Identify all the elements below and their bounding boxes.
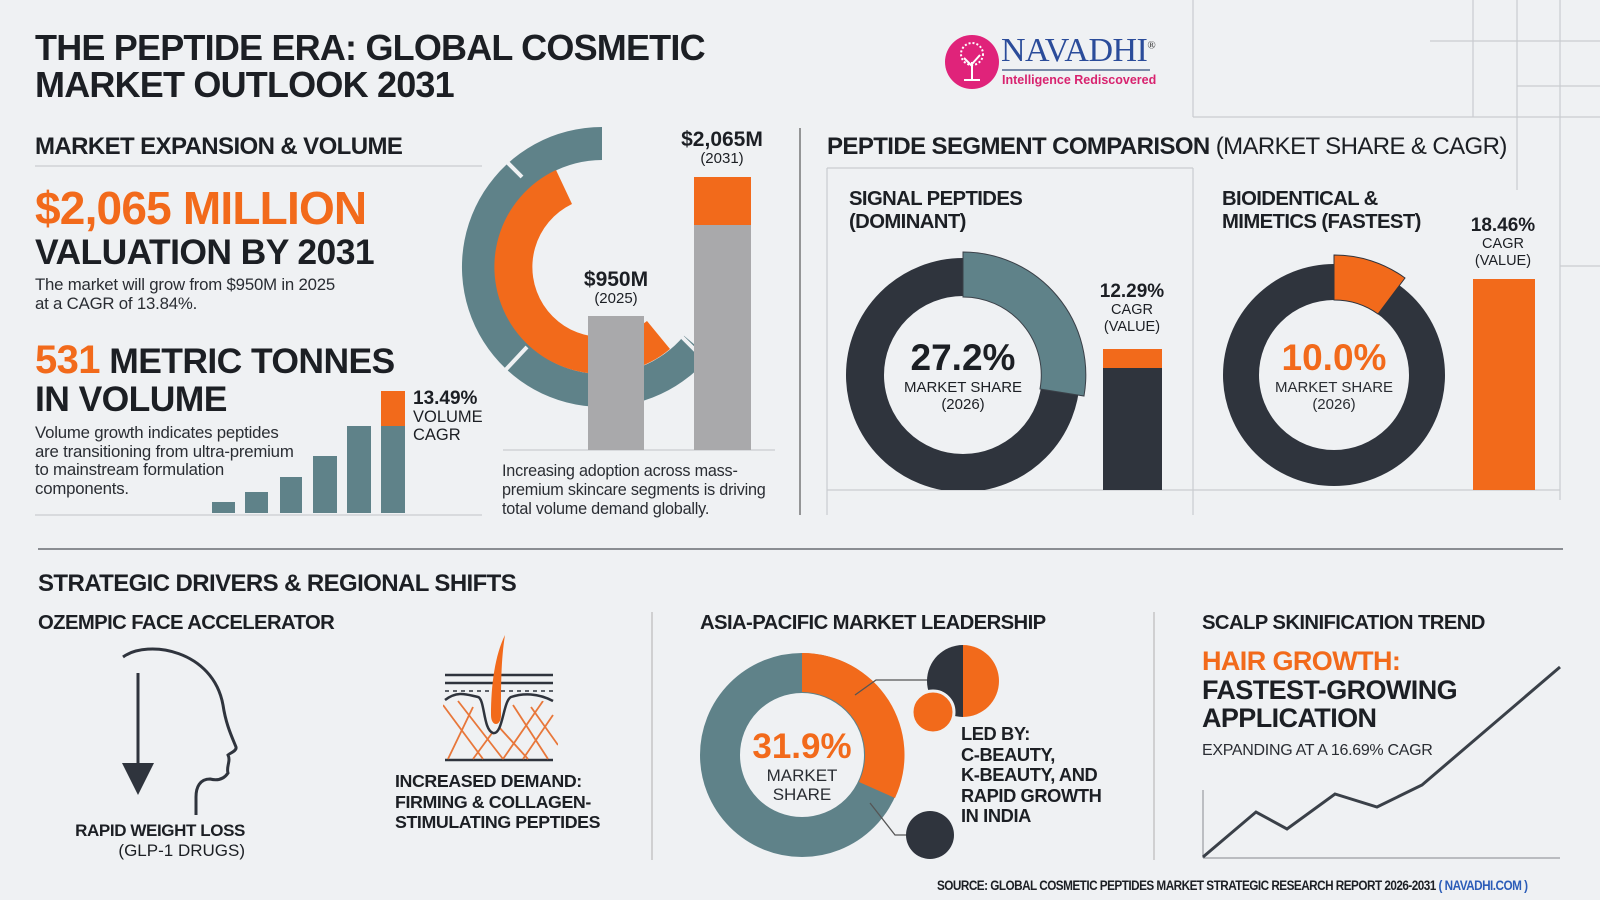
stat: volume: IN VOLUME (35, 379, 227, 419)
logo: Intelligence Rediscovered (1002, 73, 1156, 87)
chart: donut with value bars (462, 127, 751, 450)
label: rapid weight loss: (GLP-1 DRUGS) (118, 841, 245, 860)
panel: asia-pacific: ASIA-PACIFIC MARKET LEADERSHIP (700, 612, 1046, 634)
panel: asia-pacific: SHARE (773, 785, 831, 804)
label: led by (961, 723, 1101, 826)
label: led by: LED BY: (961, 723, 1030, 744)
label: increased demand: INCREASED DEMAND: (395, 771, 582, 791)
stat: volume: 531 METRIC TONNES (35, 338, 395, 382)
stat: volume: to mainstream formulation (35, 460, 224, 479)
heading: peptide segment comparison: PEPTIDE SEGMENT COMPARISON (MARKET SHARE & CAGR) (827, 133, 1507, 160)
panel: signal peptides: (VALUE) (1104, 319, 1160, 335)
panel: scalp skinification: SCALP SKINIFICATION TREND (1202, 612, 1485, 634)
label: rapid weight loss: RAPID WEIGHT LOSS (75, 821, 245, 840)
stat: volume: are transitioning from ultra-premium (35, 442, 294, 460)
panel: asia-pacific: 31.9% (752, 727, 852, 766)
panel: signal peptides: MARKET SHARE (904, 379, 1022, 396)
text: adoption (502, 462, 766, 518)
title: MARKET OUTLOOK 2031 (35, 64, 454, 105)
heading: strategic drivers: STRATEGIC DRIVERS & REGIONAL SHIFTS (38, 570, 516, 597)
label: led by: K-BEAUTY, AND (961, 764, 1097, 785)
label: led by: RAPID GROWTH (961, 784, 1101, 806)
panel: signal peptides: 12.29% (1100, 281, 1164, 302)
panel: asia-pacific: MARKET (767, 766, 837, 785)
text: adoption: premium skincare segments is driving (502, 481, 766, 499)
panel: signal peptides: CAGR (1111, 302, 1153, 318)
label: 950M: $950M (584, 268, 648, 291)
panel: biodentical & mimetics: (2026) (1312, 396, 1356, 413)
label: volume cagr: CAGR (413, 426, 461, 444)
panel: scalp skinification: HAIR GROWTH: (1202, 646, 1400, 676)
stat: volume: components. (35, 478, 129, 498)
label: volume cagr: 13.49% (413, 388, 477, 409)
label: 2065M: $2,065M (681, 128, 763, 151)
chart: volume bars (212, 391, 405, 513)
stat: volume (35, 338, 395, 498)
label: increased demand (395, 771, 600, 832)
panel: signal peptides: (2026) (941, 396, 985, 413)
label: increased demand: FIRMING & COLLAGEN- (395, 792, 591, 812)
panel: biodentical & mimetics: MIMETICS (FASTEST) (1222, 211, 1421, 233)
text: adoption: total volume demand globally. (502, 500, 709, 518)
label: volume cagr: VOLUME (413, 408, 483, 426)
panel: biodentical & mimetics: BIOIDENTICAL & (1222, 188, 1378, 210)
source footer: SOURCE: GLOBAL COSMETIC PEPTIDES MARKET STRATEGIC RESEARCH REPORT 2026-2031 ( NAVADHI.COM ) (937, 878, 1528, 893)
panel: biodentical & mimetics: MARKET SHARE (1275, 379, 1393, 396)
label: rapid weight loss (75, 821, 245, 860)
panel: ozempic (38, 612, 600, 860)
panel: signal peptides (846, 188, 1164, 490)
panel: signal peptides: 27.2% (911, 337, 1015, 378)
icon: skin collagen (443, 635, 558, 762)
label: 2065M: (2031) (700, 150, 744, 167)
panel: biodentical & mimetics (1222, 188, 1535, 490)
stat: valuation: $2,065 MILLION (35, 182, 366, 234)
title (35, 27, 705, 105)
stat: valuation (35, 182, 374, 313)
text: adoption: Increasing adoption across mass- (502, 462, 738, 480)
panel: signal peptides: (DOMINANT) (849, 211, 966, 233)
title: THE PEPTIDE ERA: GLOBAL COSMETIC (35, 27, 705, 68)
panel: ozempic: OZEMPIC FACE ACCELERATOR (38, 612, 334, 634)
logo (945, 32, 1156, 89)
panel: asia-pacific (700, 612, 1101, 859)
panel: biodentical & mimetics: (VALUE) (1475, 253, 1531, 269)
panel: biodentical & mimetics: 10.0% (1282, 337, 1386, 378)
panel: biodentical & mimetics: 18.46% (1471, 215, 1535, 236)
panel: scalp skinification: FASTEST-GROWING (1202, 674, 1457, 704)
panel: scalp skinification: APPLICATION (1202, 703, 1376, 733)
stat: volume: Volume growth indicates peptides (35, 423, 279, 442)
stat: valuation: at a CAGR of 13.84%. (35, 294, 197, 313)
label: volume cagr (413, 388, 483, 444)
panel: biodentical & mimetics: CAGR (1482, 236, 1524, 252)
icon: head with down arrow (122, 648, 238, 815)
label: led by: C-BEAUTY, (961, 744, 1055, 764)
label: 2065M (681, 128, 763, 167)
panel: scalp skinification: EXPANDING AT A 16.69% CAGR (1202, 742, 1433, 759)
label: 950M: (2025) (594, 290, 638, 307)
logo: NAVADHI® (1001, 32, 1155, 69)
heading: market expansion: MARKET EXPANSION & VOLUME (35, 133, 402, 160)
stat: valuation: VALUATION BY 2031 (35, 232, 374, 272)
panel: scalp skinification (1202, 612, 1561, 859)
label: increased demand: STIMULATING PEPTIDES (395, 812, 600, 832)
label: led by: IN INDIA (961, 805, 1031, 826)
panel: signal peptides: SIGNAL PEPTIDES (849, 188, 1022, 210)
label: 950M (584, 268, 648, 307)
stat: valuation: The market will grow from $950M in 2025 (35, 275, 335, 294)
